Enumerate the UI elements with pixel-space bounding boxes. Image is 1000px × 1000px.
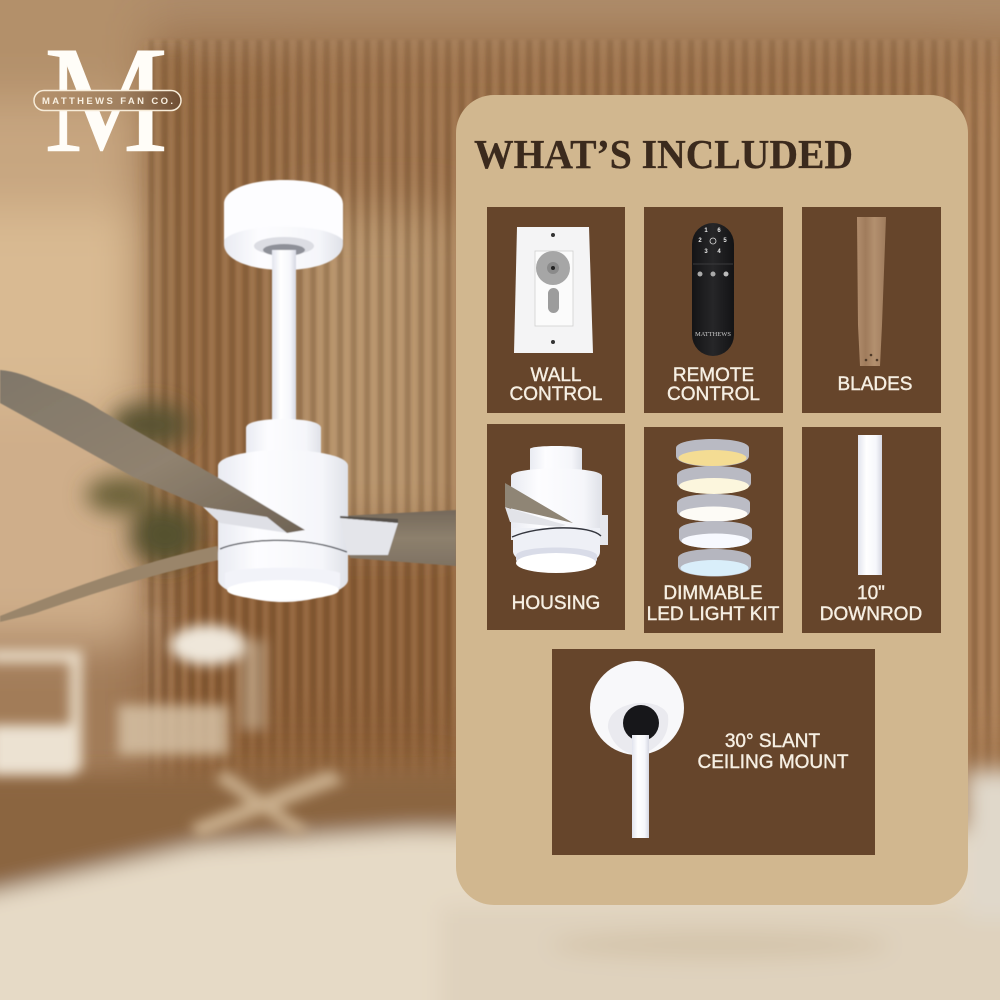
blade bracket: right [340,516,398,555]
label: CONTROL [667,384,760,405]
label: REMOTE [673,365,754,386]
logo: Matthews Fan Co.: MATTHEWS FAN CO. [42,96,173,107]
icon: remote: 6 [717,228,721,234]
motor housing [218,419,348,602]
label: WALL [530,365,582,386]
label: HOUSING [512,593,600,614]
label: CONTROL [510,384,602,405]
label: DOWNROD [820,604,922,625]
icon: remote: 3 [704,249,708,255]
fan blade: lower left [0,546,219,622]
downrod [272,250,296,422]
icon: remote: 4 [717,249,721,255]
label [667,365,760,405]
label: BLADES [838,374,912,395]
label: DIMMABLE [663,583,763,604]
icon: remote: 5 [723,238,727,244]
title: WHAT’S INCLUDED [474,131,853,177]
label [647,583,780,625]
blade bracket: left [203,507,288,533]
icon: remote: MATTHEWS [695,332,731,338]
card: housing [487,424,625,630]
label: 10" [857,583,885,604]
wall edge [146,50,186,610]
label [510,365,602,405]
logo: Matthews Fan Co.: M [44,16,168,185]
card: blades [802,207,941,413]
icon: wall control [514,227,593,353]
icon: slant mount [590,661,684,838]
icon: remote: 2 [698,238,702,244]
ceiling fan photo [0,180,456,622]
label: CEILING MOUNT [698,752,849,773]
icon: housing [505,446,608,573]
card: 30 degree slant ceiling mount [552,649,875,855]
icon: LED discs [676,439,752,576]
label [820,583,922,625]
card: 10" downrod [802,427,941,633]
fan blade: right [340,510,456,566]
icon: blade [857,217,886,366]
icon: downrod [858,435,882,575]
ceiling canopy [224,180,343,270]
label [698,731,849,773]
panel: what's included [456,95,968,905]
icon: remote: 1 [704,228,708,234]
fan blade: upper left [0,370,305,533]
icon: remote [692,223,734,356]
label: LED LIGHT KIT [647,604,780,625]
card: remote control [644,207,783,413]
label: 30° SLANT [725,731,821,752]
card: dimmable LED light kit [644,427,783,633]
card: wall control [487,207,625,413]
